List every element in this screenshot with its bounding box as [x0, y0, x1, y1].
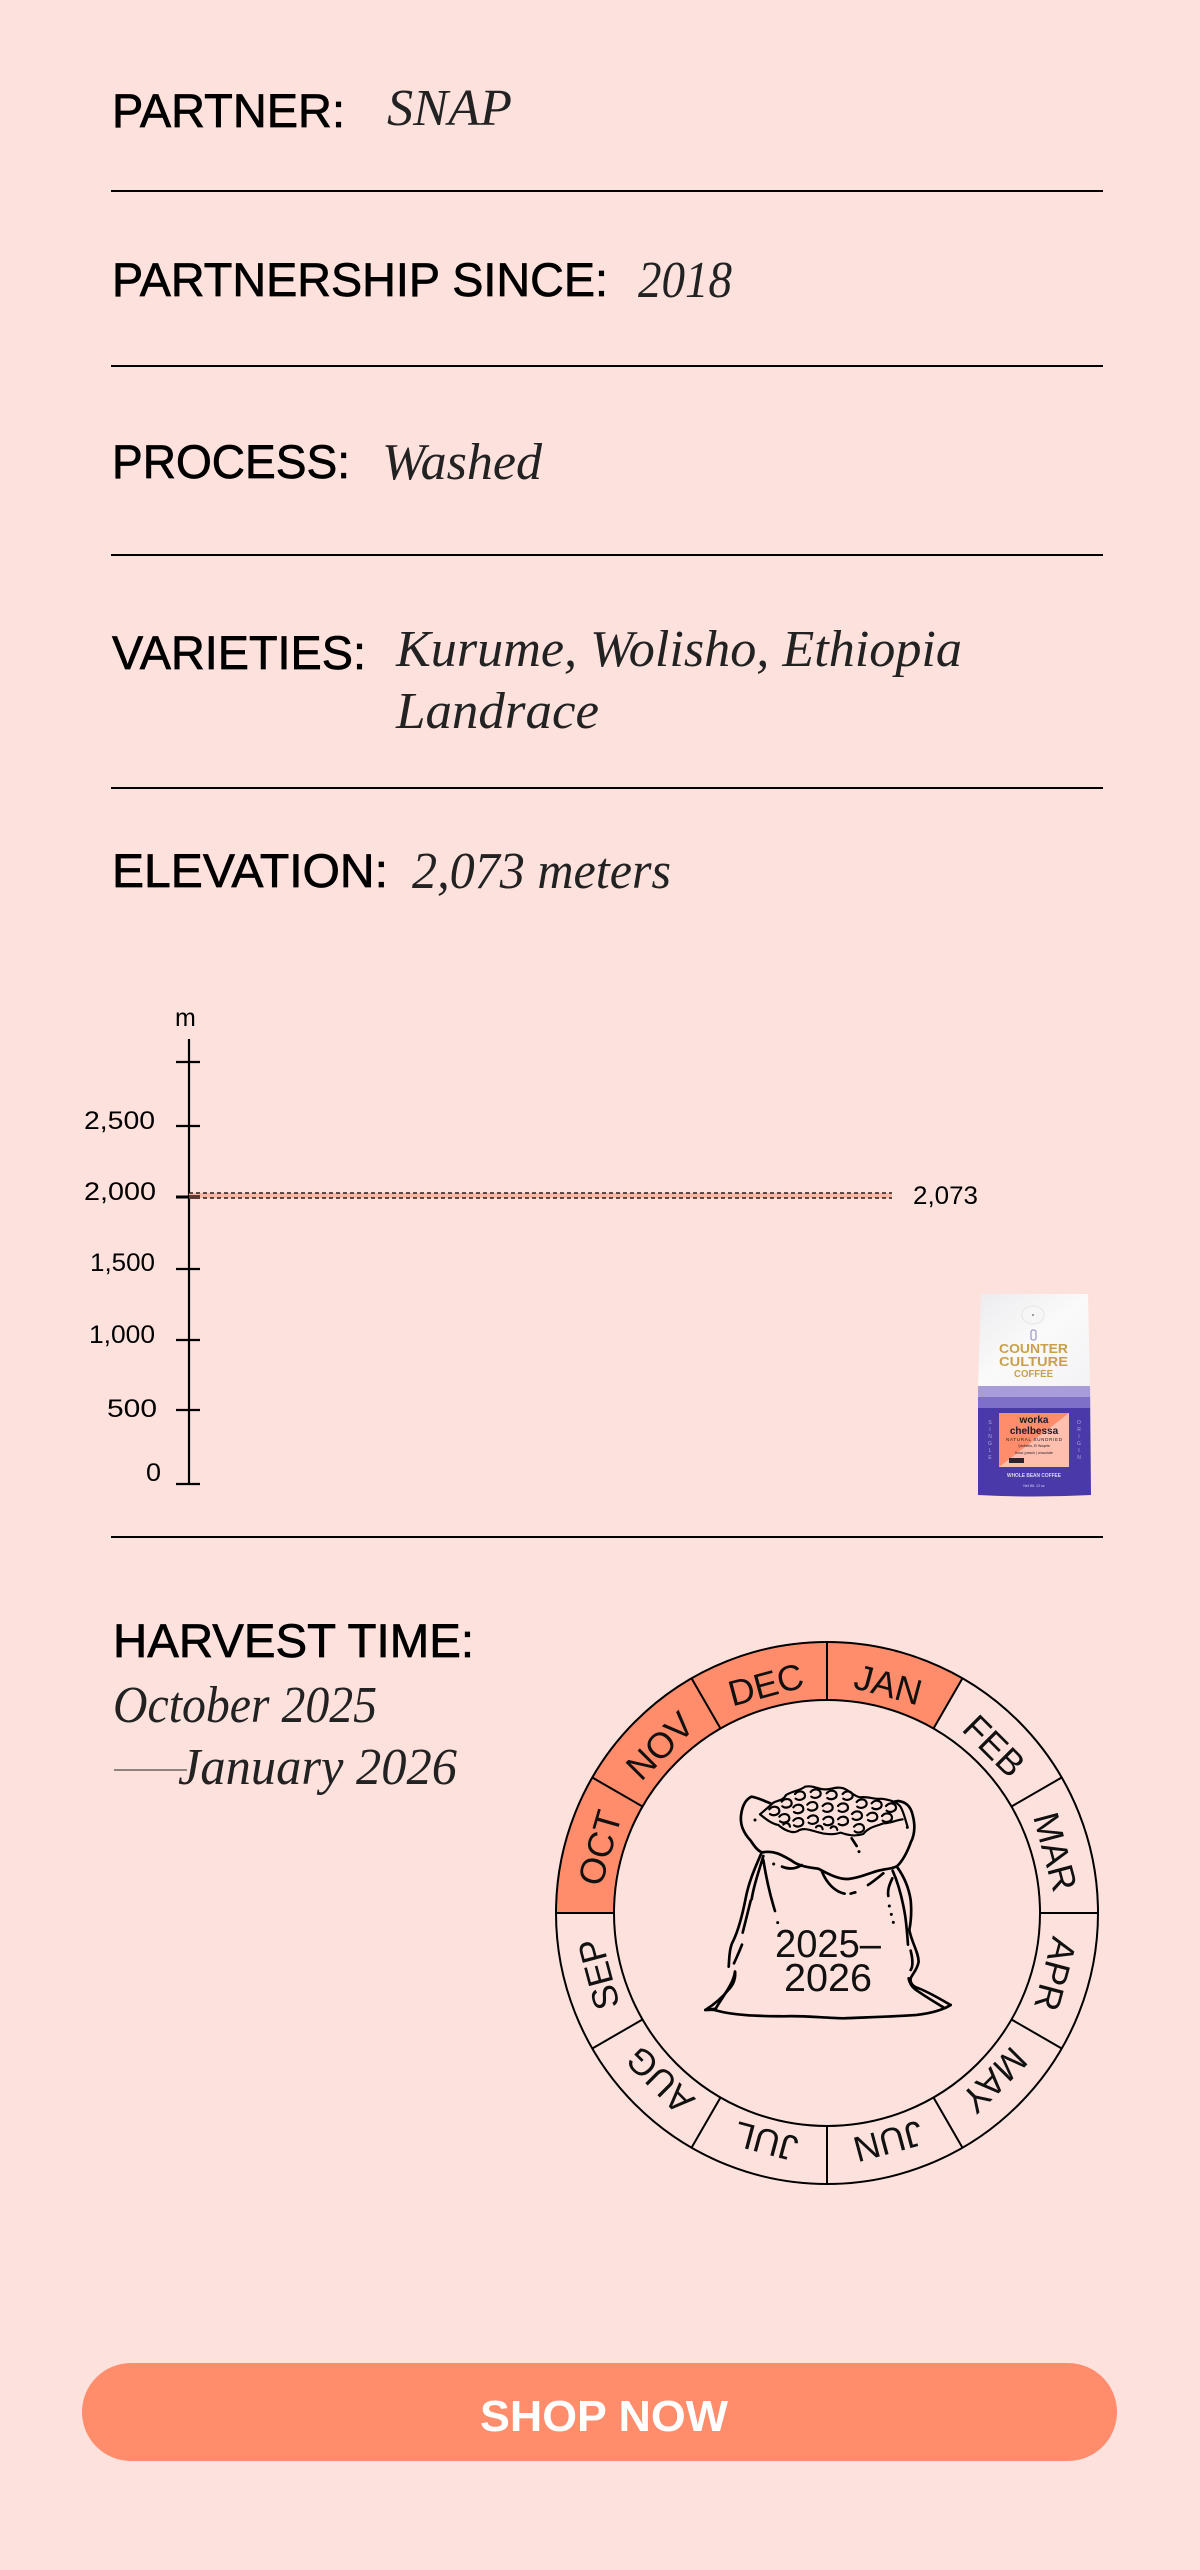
- value: 2018: 2018: [638, 252, 732, 309]
- row: elevation: [112, 843, 671, 900]
- bag side and base text: L: [989, 1448, 992, 1454]
- axis tick labels: [84, 1107, 161, 1487]
- label: elevation: ELEVATION:: [112, 844, 388, 897]
- harvest heading: HARVEST TIME:: [113, 1614, 474, 1667]
- month labels: MAY: [953, 2039, 1035, 2121]
- bag label: NATURAL SUNDRIED: [1006, 1437, 1063, 1442]
- logo mark: [1031, 1330, 1036, 1340]
- month labels: SEP: [569, 1934, 628, 2014]
- bag side and base text: WHOLE BEAN COFFEE: [1007, 1473, 1062, 1479]
- axis unit: m: [175, 1004, 196, 1032]
- month labels: JUL: [730, 2113, 802, 2170]
- bag side and base text: I: [989, 1427, 991, 1433]
- harvest end: January 2026: [178, 1739, 457, 1796]
- bag purple base: [978, 1386, 1091, 1496]
- month labels: DEC: [724, 1655, 808, 1714]
- button label: SHOP NOW: [480, 2392, 728, 2441]
- bag brand text: COUNTER: [999, 1341, 1069, 1356]
- axis tick labels: 0: [146, 1459, 161, 1487]
- value: varieties line one: Kurume, Wolisho, Ethiopia: [395, 621, 962, 678]
- value: SNAP: SNAP: [387, 80, 512, 137]
- month labels: JUN: [849, 2113, 927, 2170]
- row: partnership since: [112, 252, 732, 309]
- elevation value label: 2,073: [913, 1182, 978, 1210]
- sack rolled rim: [741, 1797, 914, 1879]
- row: partner: [112, 80, 512, 137]
- label: partnership since: PARTNERSHIP SINCE:: [112, 253, 608, 306]
- label: varieties: VARIETIES:: [112, 626, 366, 679]
- bag side and base text: R: [1077, 1427, 1081, 1433]
- coffee bag product image: [978, 1294, 1091, 1496]
- bag side and base text: N: [988, 1434, 992, 1440]
- value: varieties line two: Landrace: [395, 683, 599, 740]
- bag label: [999, 1413, 1069, 1467]
- bag side and base text: N: [1077, 1455, 1081, 1461]
- harvest start: October 2025: [113, 1677, 377, 1734]
- sack body left: [705, 1853, 761, 2010]
- wheel centre years: 2025–: [775, 1923, 881, 1966]
- shop now button: [82, 2363, 1117, 2461]
- axis tick labels: 1,500: [90, 1249, 155, 1277]
- bag white top: [978, 1294, 1090, 1386]
- month labels: [569, 1655, 1086, 2170]
- harvest time text: [113, 1614, 474, 1796]
- axis tick labels: 2,000: [84, 1178, 156, 1206]
- bag side and base text: Net Wt. 12 oz: [1023, 1484, 1045, 1488]
- chart: elevation axis: [84, 1004, 978, 1487]
- row: varieties: [112, 621, 962, 740]
- axis tick labels: 500: [107, 1395, 157, 1423]
- label: partner: PARTNER:: [112, 84, 345, 137]
- axis tick labels: 2,500: [84, 1107, 155, 1135]
- label: process: PROCESS:: [112, 435, 350, 488]
- elevation marker band: [189, 1193, 892, 1199]
- month labels: APR: [1026, 1933, 1085, 2015]
- icon: coffee sack: [705, 1786, 951, 2018]
- month labels: JAN: [850, 1656, 926, 1713]
- harvest calendar wheel: [556, 1642, 1098, 2184]
- month labels: NOV: [618, 1704, 702, 1788]
- month labels: MAR: [1025, 1808, 1086, 1896]
- wheel centre years: 2026: [784, 1957, 872, 2000]
- sack body right: [897, 1867, 951, 2008]
- bag side and base text: E: [988, 1455, 992, 1461]
- bag side and base text: S: [988, 1420, 992, 1426]
- coffee beans: [760, 1786, 907, 1835]
- sack folds: [763, 1838, 892, 1911]
- bag side and base text: I: [1078, 1448, 1080, 1454]
- sack dots: [755, 1820, 907, 1923]
- bag label: floral | peach | chocolate: [1015, 1451, 1053, 1455]
- bag label: Qedhello, El Woqete: [1018, 1444, 1050, 1448]
- month labels: OCT: [569, 1806, 630, 1890]
- sack base: [705, 2005, 951, 2018]
- month labels: AUG: [618, 2038, 702, 2122]
- wheel rings and dividers: [556, 1642, 1098, 2184]
- bag side and base text: O: [1077, 1420, 1081, 1426]
- bag label: worka: [1019, 1415, 1049, 1426]
- highlighted harvest months: [556, 1642, 962, 1913]
- value: elevation meters: 2,073 meters: [412, 843, 671, 900]
- wheel centre years: [775, 1923, 881, 2000]
- axis line and ticks: [176, 1039, 200, 1484]
- bag brand text: CULTURE: [999, 1354, 1068, 1369]
- bag valve: [1022, 1306, 1044, 1324]
- month labels: FEB: [955, 1707, 1033, 1785]
- row: process: [112, 434, 543, 491]
- bag side and base text: [988, 1420, 1081, 1488]
- bag side and base text: G: [1077, 1441, 1081, 1447]
- axis tick labels: 1,000: [89, 1321, 155, 1349]
- bag label: chelbessa: [1010, 1426, 1059, 1437]
- bag side and base text: G: [988, 1441, 992, 1447]
- bag brand text: [999, 1341, 1069, 1380]
- bag brand text: COFFEE: [1014, 1369, 1053, 1380]
- bag side and base text: I: [1078, 1434, 1080, 1440]
- value: washed: Washed: [382, 434, 543, 491]
